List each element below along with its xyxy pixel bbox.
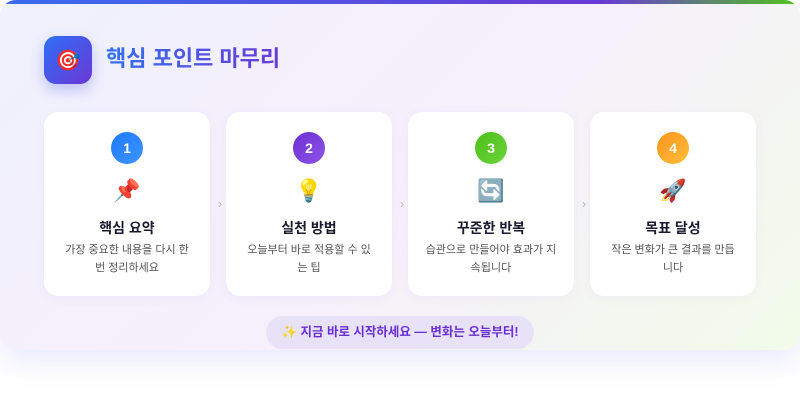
icon: target: 🎯 [56,50,80,72]
card desc 4 [611,244,735,274]
card 2 [226,112,392,296]
card desc 4: 작은 변화가 큰 결과를 만듭 [611,244,735,256]
badge 4: 4 [669,140,677,156]
card desc 2 [247,244,371,274]
card title 2: 실천 방법 [281,220,337,236]
card desc 1 [65,244,189,274]
card desc 2: 는 팁 [297,262,321,274]
arrow 1: › [218,196,222,211]
badge 4 [657,132,689,164]
icon: bulb: 💡 [295,178,323,203]
icon: rocket: 🚀 [659,178,687,203]
card desc 1: 가장 중요한 내용을 다시 한 [65,244,189,256]
arrow 3: › [582,196,586,211]
badge 1: 1 [123,140,131,156]
badge 2 [293,132,325,164]
callout pill: ✨ 지금 바로 시작하세요 — 변화는 오늘부터! [281,325,519,339]
icon: pin: 📌 [113,178,141,203]
card desc 3 [426,244,556,274]
badge 2: 2 [305,140,313,156]
card desc 3: 속됩니다 [471,262,511,274]
card desc 3: 습관으로 만들어야 효과가 지 [426,244,556,256]
card 1 [44,112,210,296]
title: 핵심 포인트 마무리 [106,46,280,71]
icon: repeat: 🔄 [477,178,505,203]
card title 4: 목표 달성 [645,220,701,236]
card title 3: 꾸준한 반복 [457,220,525,236]
card desc 1: 번 정리하세요 [95,262,159,274]
card 3 [408,112,574,296]
card desc 2: 오늘부터 바로 적용할 수 있 [247,244,371,256]
callout pill [266,316,534,349]
arrow 2: › [400,196,404,211]
icon: target [44,36,92,84]
badge 1 [111,132,143,164]
badge 3 [475,132,507,164]
card desc 4: 니다 [663,262,683,274]
badge 3: 3 [487,140,495,156]
card title 1: 핵심 요약 [99,220,155,236]
card 4 [590,112,756,296]
